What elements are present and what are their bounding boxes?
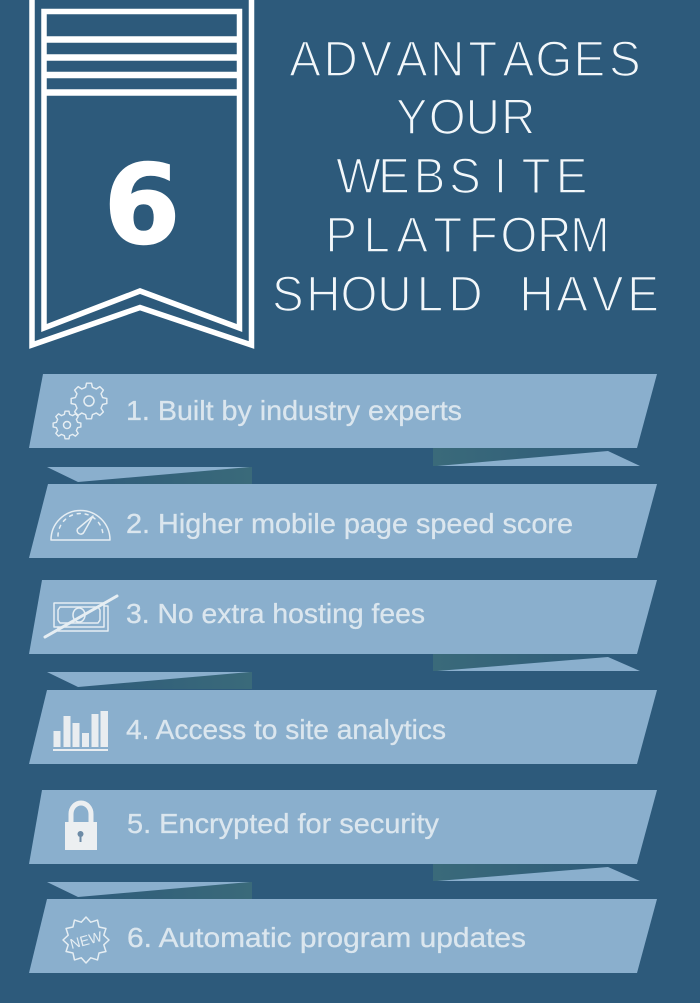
title: WEBSITE [336, 149, 587, 204]
title [272, 32, 659, 322]
icon: gears [53, 383, 107, 439]
banner outer outline [32, 0, 252, 345]
icon: speedometer [51, 510, 110, 540]
label: 4. Access to site analytics [126, 714, 446, 745]
icon: padlock [65, 803, 97, 850]
title: YOUR [396, 90, 535, 145]
label: 6. Automatic program updates [127, 922, 526, 953]
icon: bar chart [53, 711, 108, 751]
banner stripes [44, 40, 240, 92]
ribbon fold 1 [47, 448, 640, 484]
number 6: 6 [104, 141, 180, 269]
banner with number 6 [32, 0, 252, 345]
title: PLATFORM [325, 208, 610, 263]
ribbon fold 3 [47, 864, 640, 899]
label: 2. Higher mobile page speed score [126, 508, 573, 539]
label: 3. No extra hosting fees [126, 598, 425, 629]
item 1: built by industry experts [29, 374, 657, 448]
label: 5. Encrypted for security [127, 808, 439, 839]
label: 1. Built by industry experts [126, 395, 462, 426]
title: SHOULD HAVE [272, 267, 659, 322]
item 2: mobile page speed [29, 484, 657, 558]
ribbon fold 2 [47, 654, 640, 689]
icon: new badge: NEW [68, 928, 105, 952]
title: ADVANTAGES [289, 32, 641, 87]
icon: crossed-out money [45, 596, 117, 637]
item 6: automatic program updates [29, 899, 657, 973]
item 3: no extra hosting fees [29, 580, 657, 654]
item 5: encrypted for security [29, 790, 657, 864]
banner inner outline [44, 12, 240, 328]
item 4: site analytics [29, 690, 657, 764]
icon: new badge [63, 917, 109, 963]
